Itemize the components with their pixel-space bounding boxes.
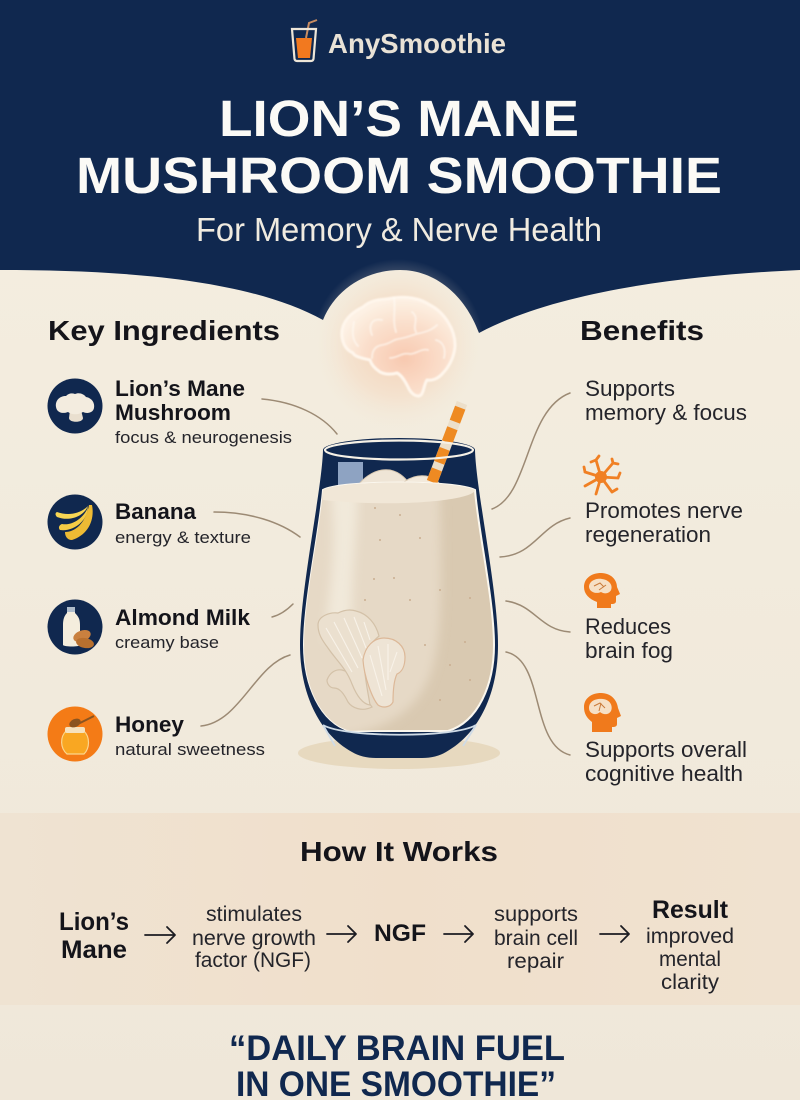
straw [432, 403, 462, 482]
ingredient: banana: energy & texture [115, 528, 251, 547]
step: stimulates NGF [192, 903, 316, 972]
icon: milk and almonds [48, 600, 102, 654]
icon: head with brain [584, 573, 620, 608]
step: lion's mane: Lion’s [59, 908, 129, 936]
subtitle: For Memory & Nerve Health [196, 211, 602, 248]
step: stimulates NGF: stimulates [206, 903, 302, 926]
glass rim highlight [325, 440, 473, 460]
ingredient: almond milk: Almond Milk [115, 605, 251, 630]
glass base highlight [323, 725, 476, 746]
step: result: clarity [661, 971, 720, 994]
speckles [329, 507, 471, 701]
panel: how it works [0, 813, 800, 1005]
ingredient: banana: Banana [115, 499, 197, 524]
heading: key ingredients: Key Ingredients [48, 315, 280, 346]
closing quote [229, 1029, 565, 1100]
glass body [300, 450, 498, 758]
glass rim [323, 438, 475, 462]
benefit: promotes nerve regeneration: regeneration [585, 522, 711, 547]
benefit: reduces brain fog: brain fog [585, 638, 673, 663]
icon: smoothie cup [292, 20, 317, 61]
arrow [145, 927, 175, 943]
heading: how it works: How It Works [300, 836, 498, 867]
icon: banana [48, 494, 102, 550]
ingredient: honey: natural sweetness [115, 740, 265, 759]
mushroom tops [352, 470, 446, 500]
logo: AnySmoothie [328, 28, 506, 59]
title: LION’S MANE [219, 90, 579, 147]
title: MUSHROOM SMOOTHIE [76, 147, 722, 204]
step: supports brain cell repair [494, 903, 578, 973]
ingredient: honey: Honey [115, 712, 185, 737]
step: supports brain cell repair: brain cell [494, 927, 578, 950]
logo [292, 20, 506, 61]
step: result: improved [646, 925, 734, 948]
ingredient: almond milk: creamy base [115, 633, 219, 652]
step: result [646, 896, 734, 994]
benefit: supports memory and focus: Supports [585, 376, 675, 401]
header band [0, 0, 800, 333]
ingredient: lion's mane [48, 376, 292, 447]
step: stimulates NGF: nerve growth [192, 927, 316, 950]
benefit: supports overall cognitive health: Supports overall [585, 737, 747, 762]
step: stimulates NGF: factor (NGF) [195, 949, 311, 972]
benefit: supports memory and focus [585, 376, 747, 425]
ingredient: honey [48, 706, 265, 762]
heading: benefits: Benefits [580, 315, 704, 346]
icon: glowing brain [312, 259, 484, 431]
benefit: supports memory and focus: memory & focus [585, 400, 747, 425]
benefit: promotes nerve regeneration [584, 456, 743, 547]
icon: mushroom [48, 378, 102, 434]
ingredient: lion's mane: Lion’s Mane [115, 376, 245, 401]
step: lion's mane [59, 908, 129, 964]
step: result: mental [659, 948, 721, 971]
connector lines [201, 393, 570, 755]
icon: neuron [584, 456, 620, 494]
arrow [600, 926, 629, 942]
ingredient: almond milk [48, 600, 251, 654]
icon: head with brain outline [584, 693, 621, 732]
step: NGF: NGF [374, 920, 426, 947]
step: result: Result [652, 896, 729, 924]
step: supports brain cell repair: supports [494, 903, 578, 926]
ingredient: banana [48, 494, 251, 550]
ingredient: lion's mane: Mushroom [115, 400, 231, 425]
title [76, 90, 722, 204]
closing quote: “DAILY BRAIN FUEL [229, 1029, 565, 1068]
benefit: supports overall cognitive health [584, 693, 747, 786]
smoothie [296, 480, 494, 736]
benefit: promotes nerve regeneration: Promotes nerve [585, 498, 743, 523]
icon: honey jar [48, 706, 102, 762]
benefit: reduces brain fog: Reduces [585, 614, 671, 639]
arrow [444, 926, 473, 942]
step: supports brain cell repair: repair [507, 950, 564, 973]
ingredient: lion's mane: focus & neurogenesis [115, 428, 292, 447]
step: lion's mane: Mane [61, 936, 127, 964]
shadow under glass [298, 737, 500, 769]
smoothie glass [296, 403, 498, 758]
arrow [327, 926, 356, 942]
benefit: supports overall cognitive health: cognitive health [585, 761, 743, 786]
benefit: reduces brain fog [584, 573, 673, 663]
mushroom illustration [318, 610, 405, 709]
